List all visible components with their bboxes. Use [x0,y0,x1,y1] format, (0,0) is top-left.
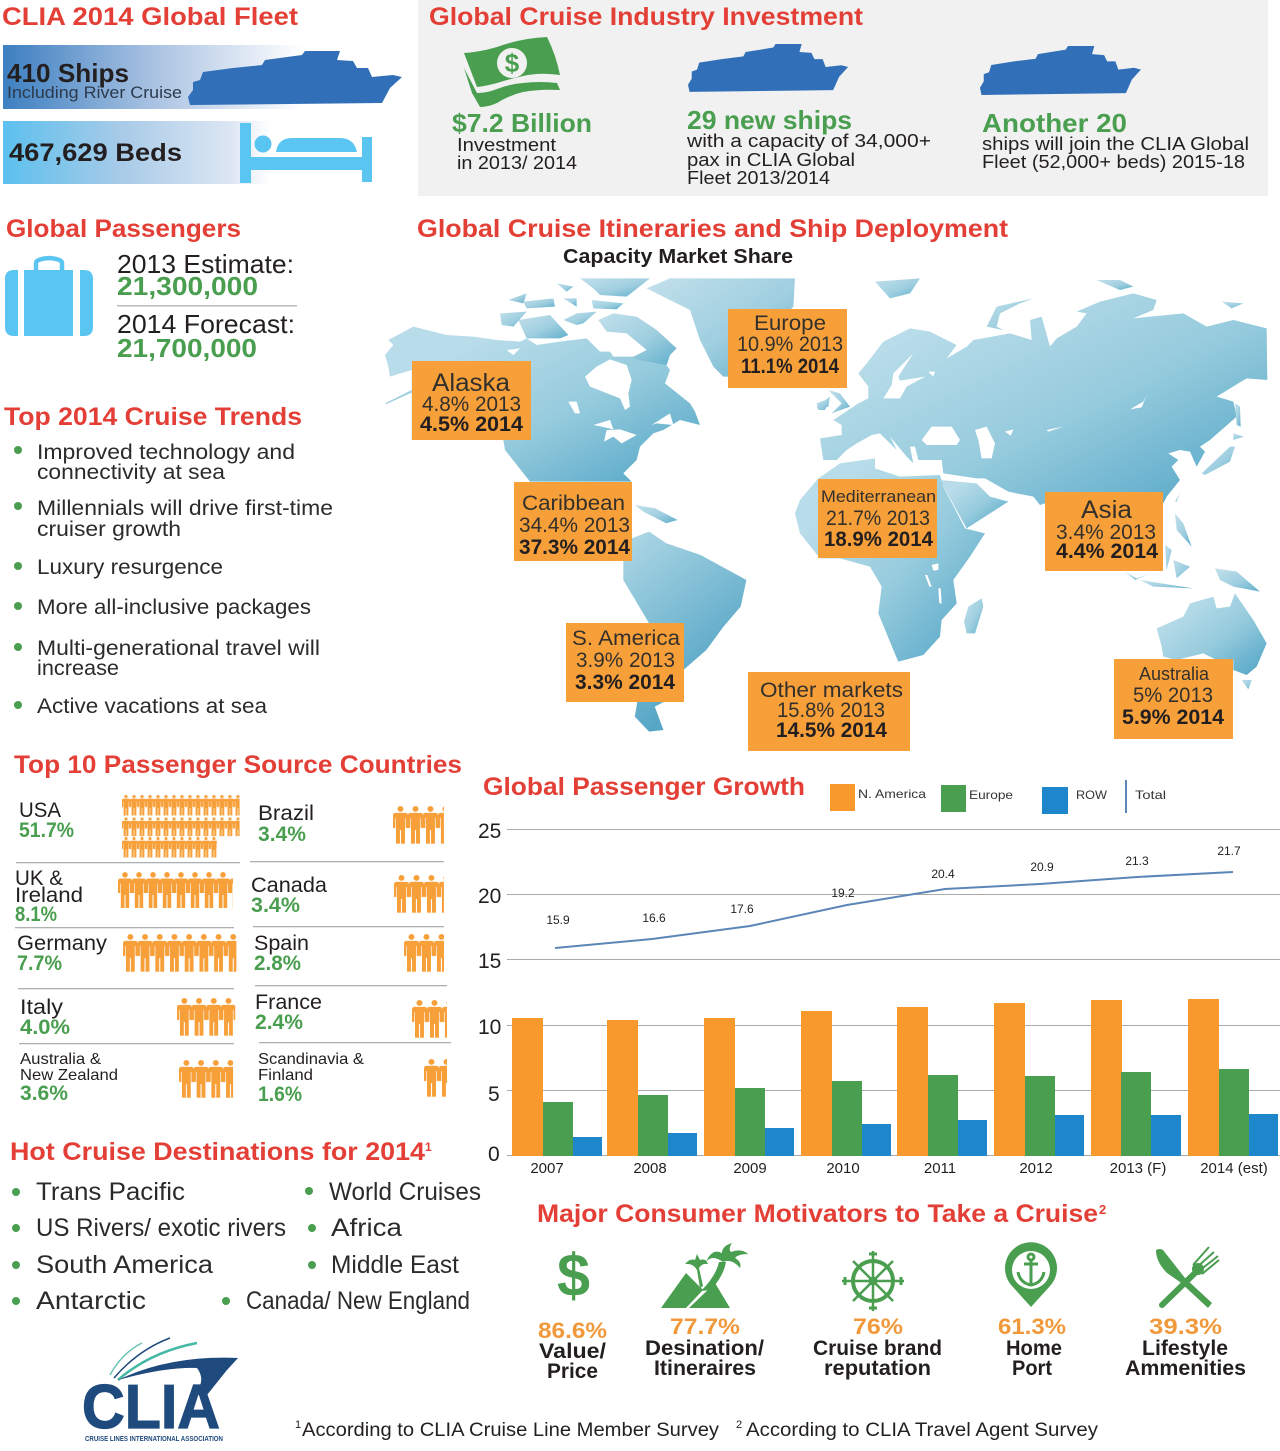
y axis labels: 25 [478,820,501,843]
callout: S. America: S. America [572,627,680,650]
callout: Caribbean: 37.3% 2014 [519,536,630,559]
chart legend: N. America [858,787,926,801]
trend list: increase [37,657,119,680]
callout: Alaska: 4.8% 2013 [422,393,521,416]
callout: S. America: 3.9% 2013 [576,649,675,672]
x axis labels: 2008 [633,1160,667,1177]
panel: Global Passenger Growth chart [478,773,1280,1177]
investment text: $7.2 Billion [452,108,592,138]
footnotes: 1 [295,1419,301,1431]
country: France: France [255,991,322,1014]
motivator: destination: Desination/ [645,1337,764,1360]
x axis labels: 2007 [530,1160,564,1177]
new ships text [686,105,931,188]
icon: palm island [661,1243,748,1308]
callout: Asia: 4.4% 2014 [1056,540,1158,563]
panel: Top 10 Passenger Source Countries [14,751,462,1106]
country: Brazil: 3.4% [258,823,306,846]
callout: Australia: 5% 2013 [1133,684,1213,707]
callout: Australia: Australia [1139,664,1210,684]
motivator: value: Value/ [539,1340,606,1363]
ships bar [3,45,303,109]
country: Germany [17,932,236,975]
motivator: brand: reputation [824,1357,931,1380]
country: France [255,991,447,1038]
beds count text: 467,629 Beds [9,139,182,167]
logo: CLIA [82,1338,238,1443]
x axis labels: 2013 (F) [1110,1160,1166,1177]
y axis labels: 5 [488,1083,500,1106]
line value labels: 21.3 [1125,854,1149,868]
new ships text: pax in CLIA Global [687,150,855,170]
bars: N. America [512,999,1219,1156]
country: Brazil [258,802,444,846]
callout: Caribbean: 34.4% 2013 [519,514,630,537]
trend list: Active vacations at sea [37,695,267,718]
line value labels: 20.4 [931,867,955,881]
callouts: regional market share [412,309,1233,751]
country: Italy: Italy [20,996,64,1019]
ships count text [7,58,182,102]
logo: CLIA: CLIA [82,1373,220,1442]
y axis labels: 15 [478,950,501,973]
heading: CLIA 2014 Global Fleet: CLIA 2014 Global Fleet [2,3,299,31]
x axis labels: 2014 (est) [1200,1160,1268,1177]
callout: Other markets: 14.5% 2014 [776,719,887,742]
country: France: 2.4% [255,1011,303,1034]
country: UK & Ireland: UK & [15,867,63,890]
destination list: US Rivers/ exotic rivers [36,1214,286,1242]
motivator: destination: Itineraires [654,1357,756,1380]
callout: Alaska: 4.5% 2014 [420,413,523,436]
x axis labels [530,1160,1268,1177]
passenger figures: 21,700,000 [117,333,257,363]
motivator: brand: Cruise brand [813,1337,942,1360]
another 20 text: Another 20 [982,108,1127,138]
country: Scandinavia & Finland [258,1051,447,1106]
panel: Top 2014 Cruise Trends [4,403,333,718]
country: Canada [251,874,444,917]
trend list: Multi-generational travel will [37,637,320,660]
investment text: in 2013/ 2014 [457,153,577,173]
heading: Global Cruise Itineraries and Ship Deployment: Global Cruise Itineraries and Ship Deployment [417,215,1009,243]
passenger figures: 2013 Estimate: [117,249,294,279]
callout: Europe: 10.9% 2013 [737,333,843,356]
x axis labels: 2009 [733,1160,767,1177]
investment text: Investment [457,135,556,155]
country: USA: 51.7% [19,819,74,842]
passenger figures: 21,300,000 [117,271,258,301]
x axis labels: 2010 [826,1160,860,1177]
country: Australia & New Zealand: Australia & [20,1051,101,1068]
chart legend: Total [1135,788,1166,802]
line value labels: 20.9 [1030,860,1054,874]
motivator: value [538,1318,607,1383]
destination list [36,1178,481,1315]
callout: Mediterranean [818,479,937,558]
trend bullets [14,446,22,709]
investment text [452,108,592,173]
trend list: Luxury resurgence [37,556,223,579]
trend list: Millennials will drive first-time [37,497,333,520]
panel: Global Passengers [5,215,297,363]
motivator: brand: 76% [853,1314,903,1339]
icon: ship wheel [842,1251,904,1311]
chart legend: Europe [969,788,1013,802]
country: Scandinavia & Finland: 1.6% [258,1083,302,1106]
another 20 text: ships will join the CLIA Global [982,134,1249,154]
motivator: home port [998,1314,1066,1380]
panel: Global Cruise Industry Investment [418,0,1268,196]
country: USA: USA [19,799,61,822]
country: Canada: 3.4% [251,894,300,917]
ships count text: 410 Ships [7,58,129,88]
trend list [37,441,333,718]
y axis labels: 0 [488,1143,500,1166]
callout: Other markets: 15.8% 2013 [777,699,885,722]
ships count text: Including River Cruise [7,83,182,102]
callout: Caribbean [514,482,632,561]
passenger figures [117,249,297,363]
callout: Other markets [748,672,910,751]
destination list: Canada/ New England [246,1287,470,1315]
x axis labels: 2012 [1019,1160,1053,1177]
motivator: lifestyle: 39.3% [1149,1314,1222,1339]
icon: bed [240,123,372,183]
chart legend: ROW [1076,788,1108,802]
country: Spain: Spain [254,932,309,955]
trend list: connectivity at sea [37,461,225,484]
new ships text: Fleet 2013/2014 [687,168,830,188]
country: Scandinavia & Finland: Scandinavia & [258,1051,364,1068]
footnotes [295,1419,1099,1441]
destination bullets [12,1187,316,1305]
callout: Europe: Europe [754,312,826,335]
motivator: lifestyle [1125,1314,1246,1380]
country: Germany: 7.7% [17,952,62,975]
line value labels: 15.9 [546,913,570,927]
panel: Hot Cruise Destinations [10,1138,481,1315]
icon: dollar sign: $ [557,1242,590,1309]
heading: Global Passengers: Global Passengers [6,215,241,243]
panel: CLIA 2014 Global Fleet [2,3,402,184]
line: total passengers [555,872,1233,948]
motivator: home port: Home [1006,1337,1062,1360]
country: Australia & New Zealand: New Zealand [20,1067,118,1084]
new ships text: with a capacity of 34,000+ [686,131,931,151]
trend list: Improved technology and [37,441,295,464]
heading: Top 10 Passenger Source Countries: Top 10 Passenger Source Countries [14,751,462,779]
country: Spain [254,932,444,975]
country: USA [19,795,240,858]
callout: Mediterranean: 21.7% 2013 [826,507,930,530]
bars: Europe [543,1069,1249,1156]
country: Australia & New Zealand [20,1051,233,1105]
icon: ship [688,44,848,92]
world map [385,278,1267,732]
motivator: destination [645,1314,764,1380]
callout: Other markets: Other markets [760,679,903,702]
line value labels: 19.2 [831,886,855,900]
country: Germany: Germany [17,932,108,955]
country: Brazil: Brazil [258,802,314,825]
callout: Mediterranean: 18.9% 2014 [824,528,933,551]
another 20 text: Fleet (52,000+ beds) 2015-18 [982,152,1245,172]
country: Italy: 4.0% [20,1016,70,1039]
footnotes: According to CLIA Travel Agent Survey [746,1420,1099,1441]
country: Spain: 2.8% [254,952,301,975]
motivator: destination: 77.7% [670,1314,740,1339]
heading: Global Cruise Industry Investment: Global Cruise Industry Investment [429,3,864,31]
icon: ship [980,46,1141,95]
callout: Caribbean: Caribbean [522,492,625,515]
callout: S. America: 3.3% 2014 [575,671,675,694]
callout: Mediterranean: Mediterranean [821,487,936,506]
destination list: World Cruises [329,1178,481,1206]
heading: Hot Cruise Destinations for 2014: Hot Cruise Destinations for 2014 [10,1138,425,1166]
motivator: home port: 61.3% [998,1314,1066,1339]
icon: dollar bill: $ [505,48,520,78]
beds bar [3,121,271,184]
callout: Europe [728,309,847,388]
panel: Major Consumer Motivators [537,1200,1246,1383]
line value labels: 16.6 [642,911,666,925]
country: UK & Ireland: 8.1% [15,903,57,926]
motivator: lifestyle: Ammenities [1125,1357,1246,1380]
callout: Alaska: Alaska [432,369,510,397]
footnotes: According to CLIA Cruise Line Member Survey [302,1420,720,1441]
icon: anchor pin [1005,1242,1057,1307]
line value labels: 21.7 [1217,844,1241,858]
footnotes: 2 [736,1419,742,1431]
new ships text: 29 new ships [687,105,852,135]
destination list: Africa [331,1214,402,1242]
callout: Asia: Asia [1081,496,1132,524]
callout: Australia [1114,659,1233,739]
y axis labels: 10 [478,1016,501,1039]
logo: CLIA: CRUISE LINES INTERNATIONAL ASSOCIATION [85,1436,223,1443]
trend list: cruiser growth [37,518,181,541]
heading: Global Passenger Growth: Global Passenger Growth [483,773,805,801]
callout: Australia: 5.9% 2014 [1122,706,1224,729]
country: Canada: Canada [251,874,327,897]
callout: Asia: 3.4% 2013 [1056,521,1156,544]
icon: ship silhouette [188,51,402,105]
callout: Asia [1045,492,1163,571]
icon: knife and fork [1156,1247,1219,1308]
callout: Europe: 11.1% 2014 [741,355,839,378]
country: Australia & New Zealand: 3.6% [20,1082,68,1105]
country: UK & Ireland [15,867,233,926]
line value labels: 17.6 [730,902,754,916]
motivator: value: Price [547,1360,598,1383]
x axis labels: 2011 [924,1160,956,1177]
bars: ROW [573,1114,1278,1156]
line value labels [546,844,1241,927]
destination list: South America [36,1251,213,1279]
heading: Major Consumer Motivators to Take a Cruise: Major Consumer Motivators to Take a Cruise [537,1200,1098,1228]
heading: Major Consumer Motivators to Take a Cruise: 2 [1099,1202,1106,1217]
chart legend [830,780,1166,814]
passenger figures: 2014 Forecast: [117,309,295,339]
motivator: brand [813,1314,942,1380]
motivator: home port: Port [1012,1357,1052,1380]
motivator: lifestyle: Lifestyle [1142,1337,1228,1360]
icon: suitcase [5,258,93,336]
destination list: Middle East [331,1251,459,1279]
callout: S. America [566,623,684,702]
country: Scandinavia & Finland: Finland [258,1067,313,1084]
y axis labels [478,820,501,1166]
destination list: Antarctic [36,1287,146,1315]
subheading: Capacity Market Share: Capacity Market Share [563,246,793,268]
trend list: More all-inclusive packages [37,596,311,619]
destination list: Trans Pacific [36,1178,185,1206]
another 20 text [982,108,1249,172]
heading: Hot Cruise Destinations for 2014: 1 [425,1140,432,1154]
y axis labels: 20 [478,885,501,908]
country: Italy [20,996,235,1039]
motivator: value: 86.6% [538,1318,607,1343]
heading: Top 2014 Cruise Trends: Top 2014 Cruise Trends [4,403,302,431]
country: UK & Ireland: Ireland [15,884,83,907]
icon: dollar bill [464,37,560,107]
callout: Alaska [412,361,531,440]
